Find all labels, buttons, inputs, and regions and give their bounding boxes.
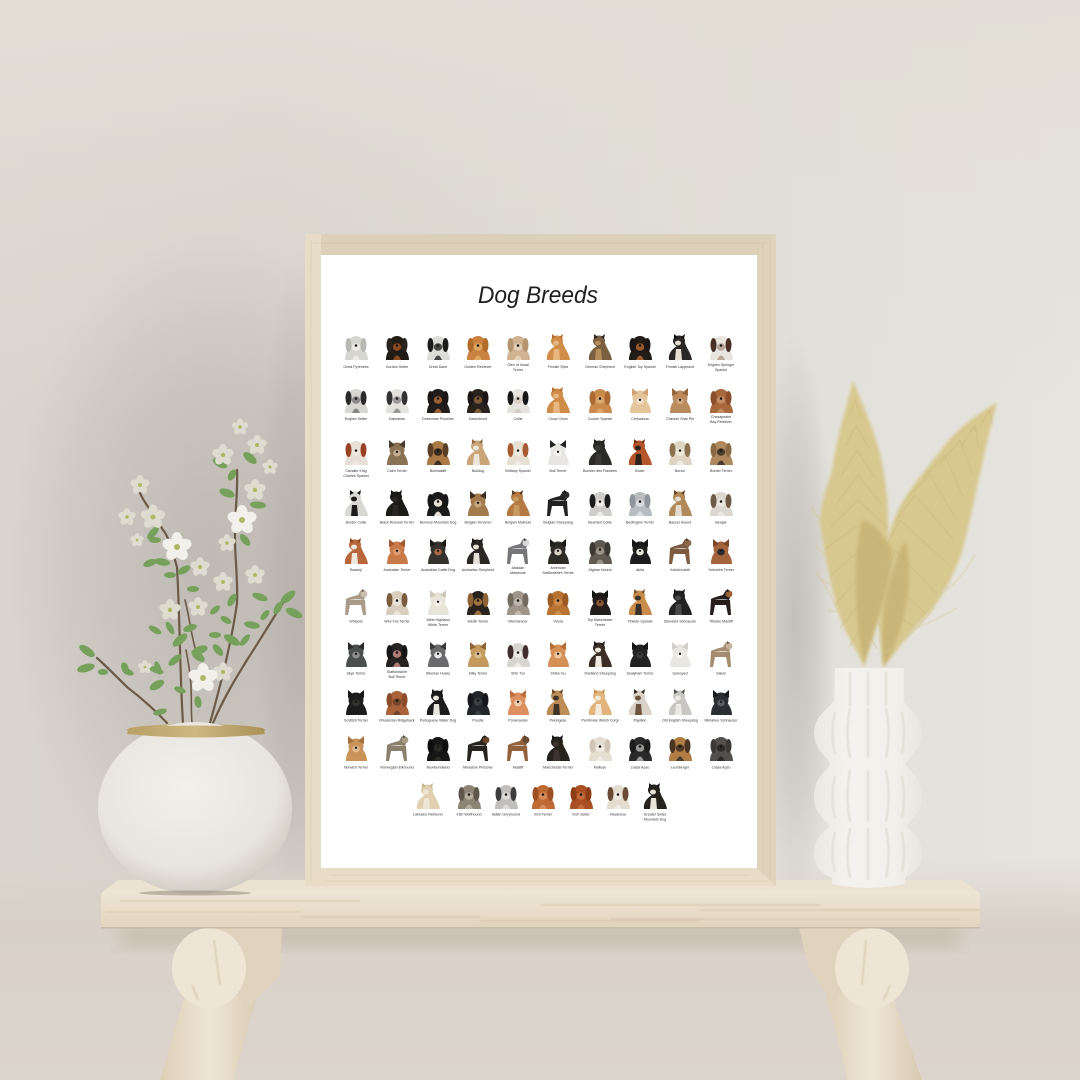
dog: Cavalier King Charles Spaniel: Charles Spaniel	[343, 474, 369, 478]
dog: Shetland Sheepdog	[584, 641, 616, 676]
dog: Boxer	[629, 439, 652, 473]
dog: Greater Swiss Mountain Dog: Mountain Dog	[644, 818, 666, 822]
dog: Whippet	[345, 589, 367, 624]
dog: Basset Hound	[669, 490, 692, 524]
dog: English Setter	[345, 389, 368, 421]
dog: Belgian Tervuren	[465, 491, 491, 524]
dog: Italian Greyhound	[492, 785, 520, 816]
dog: Papillon	[629, 689, 652, 722]
dog: English Toy Spaniel	[624, 336, 656, 369]
dog: Newfoundland	[427, 737, 450, 770]
dog: Lhasa Apso (grey): Lhasa Apso	[712, 766, 730, 770]
dog: Staffordshire Bull Terrier: Bull Terrier	[388, 675, 406, 679]
darker overlap at plume bases	[856, 520, 909, 667]
dog: Australian Cattle Dog	[421, 539, 455, 572]
dog: Yorkshire Terrier: Yorkshire Terrier	[708, 568, 735, 572]
dog: Silky Terrier: Silky Terrier	[469, 672, 488, 676]
dog: Bullmastiff: Bullmastiff	[430, 469, 446, 473]
dog: Scottish Terrier	[344, 690, 369, 722]
dog: Bouvier des Flandres: Bouvier des Flandres	[583, 469, 617, 473]
vase body	[814, 668, 922, 888]
dog: Samoyed: Samoyed	[672, 672, 688, 676]
dog: Irish Wolfhound	[457, 785, 481, 816]
dog: Vizsla	[547, 591, 570, 624]
dog: Toy Manchester Terrier	[587, 590, 613, 627]
dog: Miniature Schnauzer: Miniature Schnauzer	[705, 718, 738, 722]
dog: Manchester Terrier: Manchester Terrier	[543, 766, 574, 770]
dog: Norwegian Elkhound	[380, 735, 414, 770]
dog: Brittany Spaniel: Brittany Spaniel	[505, 469, 531, 473]
dog: Glen of Imaal Terrier	[507, 336, 530, 372]
dog: Gordon Setter	[386, 336, 409, 369]
dog: Golden Retriever: Golden Retriever	[464, 365, 492, 369]
dog: Labrador Retriever: Labrador Retriever	[413, 812, 444, 816]
leaves	[76, 450, 304, 717]
dog: Staffordshire Bull Terrier	[386, 643, 409, 679]
dog: Lhasa Apso (grey)	[710, 737, 733, 770]
dog: Australian Terrier: Australian Terrier	[383, 568, 411, 572]
dog: West Highland White Terrier: White Terrier	[428, 623, 449, 627]
dog: Australian Shepherd: Australian Shepherd	[462, 568, 494, 572]
dog: Irish Setter: Irish Setter	[572, 812, 590, 816]
dog: Great Pyrenees: Great Pyrenees	[343, 365, 369, 369]
dog: Dachshund	[467, 389, 490, 421]
picture frame	[305, 234, 776, 886]
shelf legs	[160, 928, 922, 1080]
dog: American Staffordshire Terrier: Staffordshire Terrier	[542, 571, 575, 575]
dog: Irish Wolfhound: Irish Wolfhound	[457, 812, 481, 816]
dog: Pembroke Welsh Corgi	[582, 689, 619, 722]
dog: Chinese Shar Pei	[666, 388, 694, 421]
dog: Pomeranian: Pomeranian	[508, 718, 528, 722]
dog: Skye Terrier	[346, 642, 367, 676]
dog: Bernese Mountain Dog: Bernese Mountain Dog	[420, 520, 456, 524]
dog: Miniature Pinscher	[463, 735, 494, 770]
dog: Bullmastiff	[427, 441, 450, 473]
dog: Akita	[630, 539, 651, 572]
dog: Welsh Terrier	[467, 591, 490, 624]
dog: Bearded Collie	[588, 492, 612, 524]
dog: Pekingese: Pekingese	[550, 718, 566, 722]
dog: Sealyham Terrier: Sealyham Terrier	[626, 672, 654, 676]
dog: Border Collie: Border Collie	[346, 520, 366, 524]
dog: Italian Greyhound: Italian Greyhound	[492, 812, 520, 816]
dog: American Staffordshire Terrier: American	[550, 566, 566, 570]
dog: Staffordshire Bull Terrier: Staffordshire	[387, 670, 407, 674]
dog: Shetland Sheepdog: Shetland Sheepdog	[584, 672, 616, 676]
dog: Black Russian Terrier: Black Russian Terrier	[380, 520, 415, 524]
dog: Collie: Collie	[514, 417, 522, 421]
dog: Borzoi: Borzoi	[675, 469, 685, 473]
dog: Gordon Setter: Gordon Setter	[386, 365, 409, 369]
dog: Belgian Tervuren: Belgian Tervuren	[465, 520, 491, 524]
dog: Golden Retriever	[464, 336, 492, 369]
dog: Tibetan Spaniel	[628, 589, 653, 624]
dog: Lhasa Apso: Lhasa Apso	[631, 766, 649, 770]
dog: German Shepherd	[585, 334, 615, 369]
dog: Newfoundland: Newfoundland	[427, 766, 449, 770]
dog: Chihuahua: Chihuahua	[631, 417, 649, 421]
dog: Maltese	[589, 737, 612, 770]
dog: Australian Cattle Dog: Australian Cattle Dog	[421, 568, 455, 572]
dog: Beagle	[710, 492, 733, 524]
dog: Great Dane: Great Dane	[429, 365, 447, 369]
dog: Rhodesian Ridgeback	[379, 691, 415, 722]
dog: Whippet: Whippet	[349, 620, 363, 624]
dog: Chow Chow: Chow Chow	[548, 417, 568, 421]
dog: Tibetan Mastiff: Tibetan Mastiff	[709, 620, 733, 624]
dog: Cairn Terrier	[387, 440, 408, 473]
dog: Chesapeake Bay Retriever	[710, 389, 733, 424]
dog: Norwich Terrier: Norwich Terrier	[344, 766, 369, 770]
dog: Collie	[507, 389, 530, 421]
dog: Chesapeake Bay Retriever: Bay Retriever	[710, 420, 733, 424]
poster title: Dog Breeds	[478, 282, 598, 309]
dog: Belgian Sheepdog	[543, 490, 573, 524]
dog: Alaskan Malamute	[507, 538, 529, 575]
dog: Glen of Imaal Terrier: Glen of Imaal	[507, 363, 529, 367]
dog: Finnish Spitz: Finnish Spitz	[548, 365, 568, 369]
dog: Dalmatian	[386, 389, 409, 421]
stray wisps	[812, 506, 975, 654]
dog: Toy Manchester Terrier: Toy Manchester	[587, 618, 613, 622]
dog: Beagle: Beagle	[715, 520, 727, 524]
dog: Shih Tzu	[507, 643, 530, 676]
dog: Glen of Imaal Terrier: Terrier	[513, 368, 524, 372]
dog: Belgian Malinois	[505, 490, 531, 524]
dog: Greater Swiss Mountain Dog: Greater Swiss	[644, 812, 666, 816]
dog: Cocker Spaniel	[588, 389, 612, 421]
dog: Havanese	[607, 785, 630, 816]
dog: Finnish Spitz	[547, 334, 570, 369]
dog: Irish Terrier	[532, 785, 555, 816]
dog: Belgian Sheepdog: Belgian Sheepdog	[543, 520, 573, 524]
branches	[97, 470, 283, 723]
dog: English Toy Spaniel: English Toy Spaniel	[624, 365, 656, 369]
dog: Doberman Pinscher	[422, 389, 455, 421]
dog: Vizsla: Vizsla	[553, 620, 563, 624]
dog: Weimaraner: Weimaraner	[508, 620, 529, 624]
dog: Great Pyrenees	[343, 336, 369, 369]
dog: Rhodesian Ridgeback: Rhodesian Ridgeback	[379, 718, 415, 722]
dog: Saluki: Saluki	[716, 672, 726, 676]
dog: Leonberger	[669, 737, 692, 770]
dog: English Springer Spaniel	[708, 336, 735, 372]
shelf	[101, 880, 980, 928]
dog: Borzoi	[669, 441, 692, 473]
dog: Chinese Shar Pei: Chinese Shar Pei	[666, 417, 694, 421]
dog: Basset Hound: Basset Hound	[669, 520, 691, 524]
bowl body	[98, 722, 292, 894]
dog: Welsh Terrier: Welsh Terrier	[467, 620, 489, 624]
dog: Finnish Lapphund	[666, 334, 694, 369]
dog: Doberman Pinscher: Doberman Pinscher	[422, 417, 455, 421]
dog: Weimaraner	[507, 591, 530, 624]
dog: Miniature Pinscher: Miniature Pinscher	[463, 766, 494, 770]
dog: Australian Shepherd	[462, 538, 494, 572]
plant in white bowl	[76, 418, 304, 896]
dog: Silky Terrier	[468, 642, 489, 676]
dog: Great Dane	[427, 336, 450, 369]
dog: Skye Terrier: Skye Terrier	[346, 672, 366, 676]
feathery strands	[825, 400, 992, 649]
dog: Wire Fox Terrier: Wire Fox Terrier	[384, 620, 411, 624]
dog: Scottish Terrier: Scottish Terrier	[344, 718, 369, 722]
dog: Miniature Schnauzer	[705, 690, 738, 722]
dog: Irish Setter	[570, 785, 593, 816]
dog: Wire Fox Terrier	[384, 591, 411, 624]
dog: Tibetan Spaniel: Tibetan Spaniel	[628, 620, 653, 624]
dog: Siberian Husky: Siberian Husky	[426, 672, 450, 676]
dog: German Shepherd: German Shepherd	[585, 365, 615, 369]
dog: Siberian Husky	[426, 642, 450, 676]
dog: Finnish Lapphund: Finnish Lapphund	[666, 365, 694, 369]
dog: Portuguese Water Dog	[420, 689, 456, 722]
dog: Black Russian Terrier	[380, 490, 415, 524]
dog: West Highland White Terrier	[426, 590, 450, 627]
dog: Papillon: Papillon	[634, 718, 646, 722]
dog: Maltese: Maltese	[594, 766, 606, 770]
dog: Belgian Malinois: Belgian Malinois	[505, 520, 531, 524]
bowl rim	[127, 724, 265, 736]
dog: Yorkshire Terrier	[708, 539, 735, 572]
dog: Cavalier King Charles Spaniel	[343, 441, 369, 478]
dog: Border Collie	[345, 490, 368, 524]
dog: Australian Terrier	[383, 539, 411, 572]
dog: Bull Terrier	[548, 440, 569, 473]
dog: Poodle: Poodle	[472, 718, 484, 722]
dog: Samoyed	[670, 642, 691, 676]
dog: Bearded Collie: Bearded Collie	[588, 520, 612, 524]
dog: Standard Schnauzer: Standard Schnauzer	[664, 620, 697, 624]
dog: Dalmatian: Dalmatian	[389, 417, 405, 421]
dog: Greater Swiss Mountain Dog	[644, 783, 667, 822]
dog: Labrador Retriever	[413, 783, 444, 816]
dog: Poodle	[467, 691, 490, 722]
dog: Pekingese	[547, 689, 570, 722]
dog: Chihuahua	[630, 388, 651, 421]
dog: Cocker Spaniel: Cocker Spaniel	[588, 417, 612, 421]
dog: Shih Tzu: Shih Tzu	[511, 672, 525, 676]
dog: Standard Schnauzer	[664, 589, 697, 624]
dog: Shiba Inu	[548, 642, 569, 676]
dog: Mastiff: Mastiff	[513, 766, 523, 770]
dog: Old English Sheepdog	[662, 689, 698, 722]
dog: Xoloitzcuintli	[669, 538, 691, 572]
dog: Border Terrier	[710, 441, 733, 473]
dog: Shiba Inu: Shiba Inu	[550, 672, 566, 676]
dog: American Staffordshire Terrier	[542, 539, 575, 575]
dog: Pembroke Welsh Corgi: Pembroke Welsh Corgi	[582, 718, 619, 722]
dog: Norwich Terrier	[344, 736, 369, 770]
dog: Bernese Mountain Dog	[420, 492, 456, 524]
left plume	[820, 380, 888, 667]
dog: Pomeranian	[508, 690, 529, 722]
blossoms	[117, 418, 279, 682]
dog: Lhasa Apso	[629, 737, 652, 770]
pampas in ribbed white vase	[812, 380, 997, 888]
dog: Bulldog	[467, 439, 490, 473]
dog: Norwegian Elkhound: Norwegian Elkhound	[380, 766, 414, 770]
dog: Akita: Akita	[636, 568, 644, 572]
dog: Bouvier des Flandres	[583, 439, 617, 473]
dog: Old English Sheepdog: Old English Sheepdog	[662, 718, 698, 722]
dog: Cavalier King Charles Spaniel: Cavalier King	[345, 469, 367, 473]
dog: Manchester Terrier	[543, 735, 574, 770]
dog: Bedlington Terrier: Bedlington Terrier	[626, 520, 655, 524]
dog: Afghan Hound	[589, 540, 612, 572]
dog: Bedlington Terrier	[626, 492, 655, 524]
dog: Chow Chow	[547, 387, 570, 421]
dog: Dachshund: Dachshund	[469, 417, 487, 421]
dog: English Springer Spaniel: English Springer	[708, 363, 735, 367]
dog: Border Terrier: Border Terrier	[710, 469, 733, 473]
dog: Brittany Spaniel	[505, 441, 531, 473]
dog: Afghan Hound: Afghan Hound	[589, 568, 611, 572]
dog: Chesapeake Bay Retriever: Chesapeake	[711, 415, 731, 419]
dog: Basenji: Basenji	[350, 568, 362, 572]
dog: English Springer Spaniel: Spaniel	[715, 368, 727, 372]
dog: Havanese: Havanese	[610, 812, 626, 816]
dog: Basenji	[345, 538, 368, 572]
dog: Tibetan Mastiff	[709, 589, 733, 624]
breed grid	[343, 334, 738, 822]
dog: Saluki	[710, 641, 732, 676]
dog: Alaskan Malamute: Malamute	[510, 571, 526, 575]
dog: Irish Terrier: Irish Terrier	[534, 812, 553, 816]
dog: Mastiff	[507, 735, 529, 770]
dog: Bull Terrier: Bull Terrier	[549, 469, 567, 473]
dog: Leonberger: Leonberger	[671, 766, 690, 770]
right plume	[878, 402, 997, 667]
dog: Portuguese Water Dog: Portuguese Water Dog	[420, 718, 456, 722]
dog: Toy Manchester Terrier: Terrier	[595, 623, 606, 627]
dog: Bulldog: Bulldog	[472, 469, 484, 473]
dog: Xoloitzcuintli: Xoloitzcuintli	[670, 568, 690, 572]
dog: Boxer: Boxer	[635, 469, 645, 473]
dog: English Setter: English Setter	[345, 417, 368, 421]
dog: Sealyham Terrier	[626, 642, 654, 676]
dog: Alaskan Malamute: Alaskan	[512, 566, 524, 570]
dog: Cairn Terrier: Cairn Terrier	[387, 469, 408, 473]
dog: West Highland White Terrier: West Highland	[426, 618, 450, 622]
